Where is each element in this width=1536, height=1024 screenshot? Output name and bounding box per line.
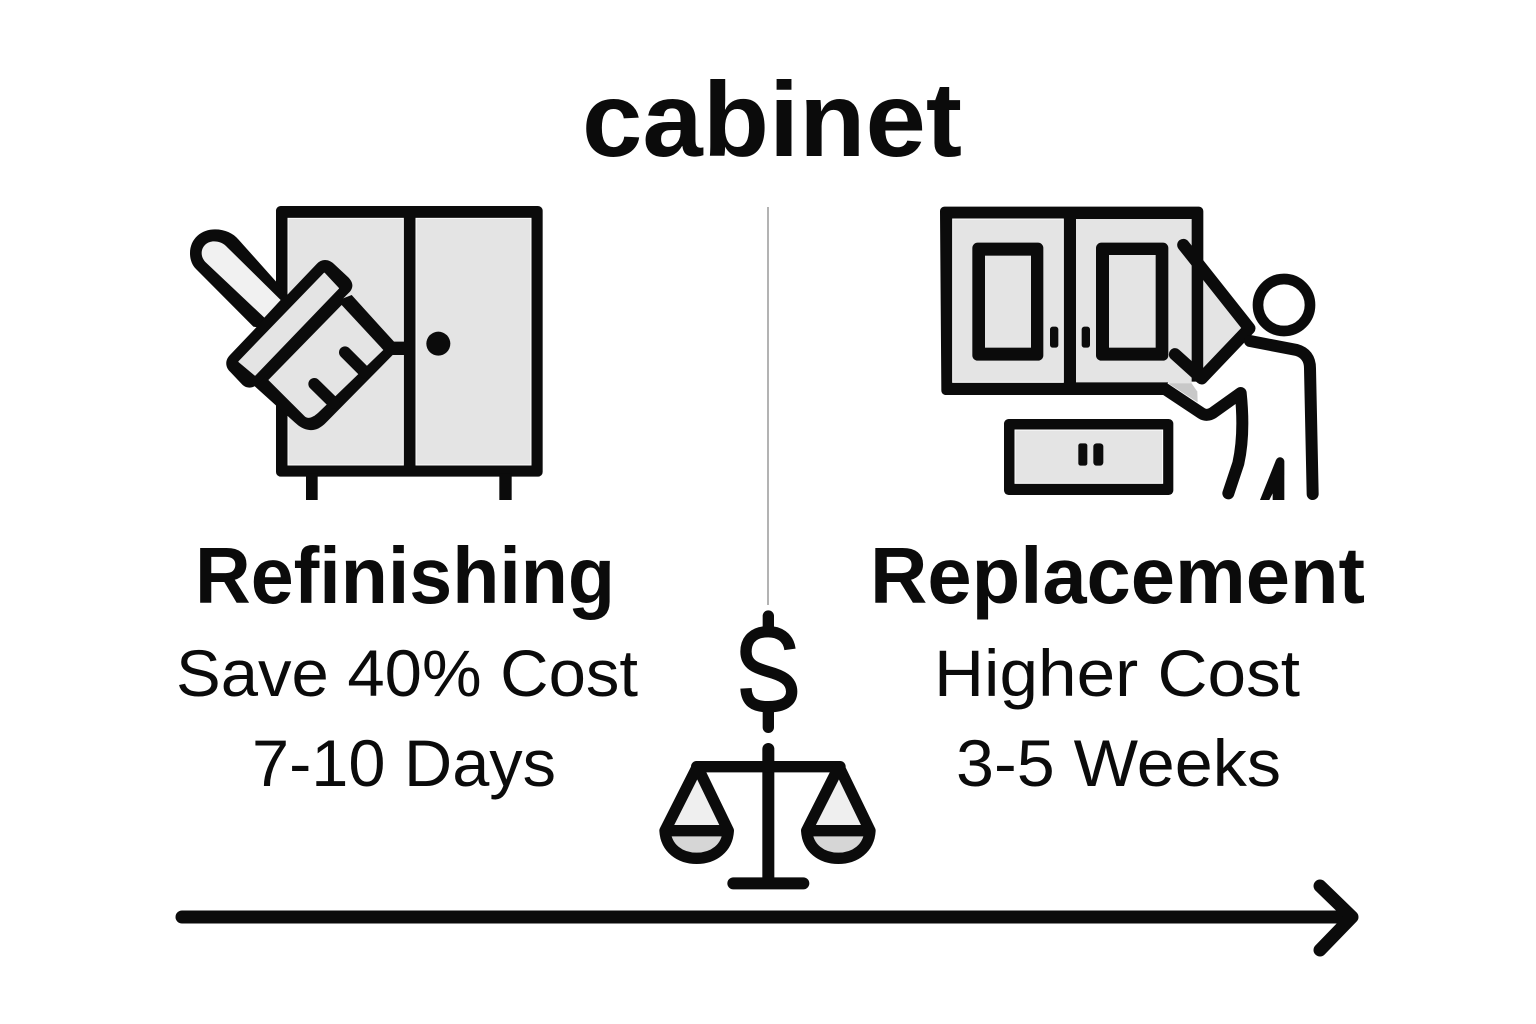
icon: cabinet replacement with installer xyxy=(940,207,1313,500)
heading: Refinishing: Refinishing xyxy=(195,531,615,620)
panel: replacement text xyxy=(870,531,1365,800)
paint brush xyxy=(190,229,404,430)
wall cabinet xyxy=(940,207,1203,402)
icon: balance scale xyxy=(665,749,870,883)
panel: refinishing text xyxy=(176,531,638,800)
cost: Save 40% Cost: Save 40% Cost xyxy=(176,636,638,710)
center divider line xyxy=(767,207,769,605)
installer figure xyxy=(1165,245,1313,500)
heading: Replacement: Replacement xyxy=(870,531,1365,620)
cost: Higher Cost: Higher Cost xyxy=(934,636,1300,710)
base drawer xyxy=(1004,419,1173,495)
time: 3-5 Weeks: 3-5 Weeks xyxy=(956,726,1281,800)
cabinet body xyxy=(276,206,543,500)
arrow: timeline xyxy=(182,886,1352,950)
title: cabinet xyxy=(582,61,962,179)
time: 7-10 Days: 7-10 Days xyxy=(252,726,556,800)
icon: dollar sign xyxy=(746,616,792,727)
icon: cabinet with paint brush xyxy=(190,206,543,500)
